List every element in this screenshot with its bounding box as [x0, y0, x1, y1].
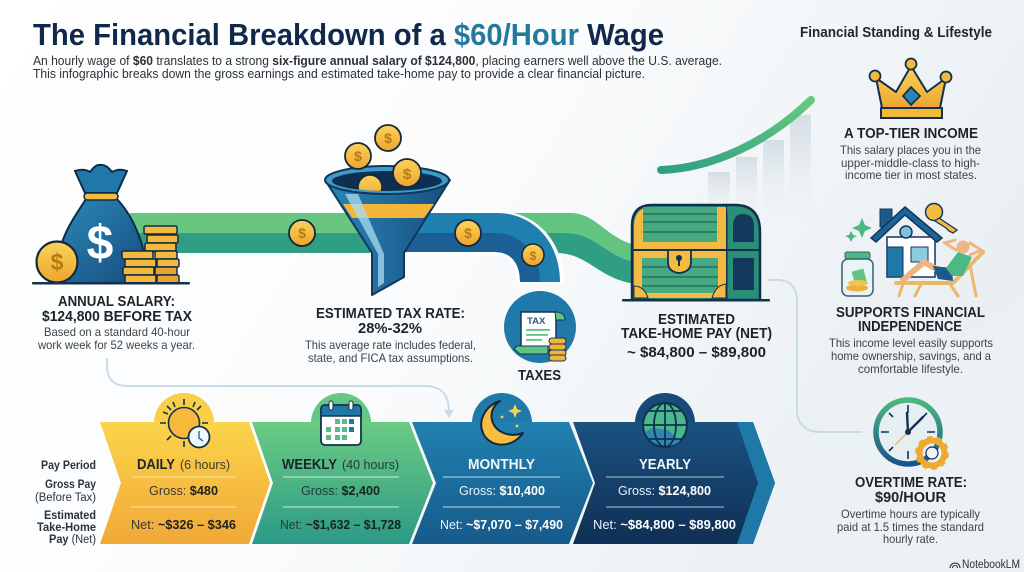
table row labels: Estimated — [44, 510, 96, 522]
arrow head — [444, 410, 454, 418]
text: take-home pay: ESTIMATED — [658, 312, 735, 328]
text: top-tier income — [840, 126, 981, 182]
coin on blue pipe bend: $ — [530, 249, 537, 263]
label: taxes: TAXES — [518, 368, 561, 384]
text: financial independence — [829, 305, 993, 376]
icon: tax funnel: $ — [384, 130, 392, 146]
text: financial independence: home ownership, savings, and a — [831, 349, 991, 363]
panel: daily: Net: ~$326 – $346 — [131, 518, 236, 532]
panel: weekly: Gross: $2,400 — [301, 484, 380, 498]
icon: tax funnel: $ — [403, 166, 412, 183]
table row labels: Pay (Net) — [49, 534, 96, 546]
intro text — [33, 54, 722, 81]
connector: net pay to overtime — [767, 280, 862, 432]
text: take-home pay — [621, 312, 772, 361]
text: top-tier income: This salary places you in the — [840, 143, 981, 157]
table row labels — [35, 460, 97, 546]
table row labels: Gross Pay — [45, 479, 97, 491]
coin on green pipe — [289, 220, 315, 246]
text: estimated tax rate: ESTIMATED TAX RATE: — [316, 306, 465, 322]
coin on green pipe: $ — [298, 225, 306, 241]
panel: yearly: Gross: $124,800 — [618, 484, 711, 498]
coin on blue pipe — [455, 220, 481, 246]
text: overtime rate: paid at 1.5 times the standard — [837, 520, 984, 534]
text: annual salary: work week for 52 weeks a year. — [37, 338, 195, 352]
panel: weekly: Net: ~$1,632 – $1,728 — [280, 518, 401, 532]
text: annual salary: ANNUAL SALARY: — [58, 294, 175, 310]
icon: tax funnel: $ — [354, 148, 362, 164]
text: financial independence: INDEPENDENCE — [858, 319, 962, 335]
table row labels: (Before Tax) — [35, 492, 96, 504]
text: overtime rate: Overtime hours are typically — [841, 507, 980, 521]
icon: calendar — [321, 401, 361, 445]
icon: crown — [870, 58, 952, 118]
text: financial independence: SUPPORTS FINANCIAL — [836, 305, 985, 321]
icon: treasure chest — [622, 205, 770, 302]
panel: daily — [100, 393, 270, 544]
panel: daily: Gross: $480 — [149, 484, 218, 498]
panel: daily: (6 hours) — [180, 457, 230, 472]
text: annual salary: Based on a standard 40-hour — [44, 325, 190, 339]
text: estimated tax rate: state, and FICA tax assumptions. — [308, 351, 473, 365]
icon: taxes document — [504, 291, 576, 363]
panel: yearly — [573, 393, 775, 544]
icon: money bag — [32, 165, 190, 284]
panel: weekly: (40 hours) — [342, 457, 399, 472]
text: take-home pay: ~ $84,800 – $89,800 — [627, 345, 766, 361]
panel: yearly: Net: ~$84,800 – $89,800 — [593, 518, 736, 532]
coin on blue pipe bend — [522, 244, 544, 266]
icon: house, key and lounger — [842, 204, 983, 296]
connector: salary to monthly — [107, 358, 449, 412]
panel: monthly: Net: ~$7,070 – $7,490 — [440, 518, 563, 532]
text: overtime rate: OVERTIME RATE: — [855, 475, 967, 491]
icon: overtime clock — [876, 400, 947, 468]
title: The Financial Breakdown of a $60/Hour Wage — [33, 17, 664, 52]
text: top-tier income: income tier in most states. — [845, 168, 977, 182]
panel: weekly: WEEKLY — [282, 457, 337, 473]
icon: crescent moon — [481, 401, 523, 445]
text: estimated tax rate: 28%-32% — [358, 321, 422, 337]
panel: monthly — [412, 393, 593, 544]
text: estimated tax rate: This average rate includes federal, — [305, 338, 476, 352]
icon: globe — [643, 403, 687, 447]
text: financial independence: This income level easily supports — [829, 336, 993, 350]
icon: money bag: $ — [87, 217, 114, 270]
icon: tax funnel — [325, 125, 450, 295]
panel: weekly — [252, 393, 433, 544]
text: take-home pay: TAKE-HOME PAY (NET) — [621, 326, 772, 342]
coin on blue pipe: $ — [464, 225, 472, 241]
text: top-tier income: upper-middle-class to high- — [841, 156, 980, 170]
text: top-tier income: A TOP-TIER INCOME — [844, 126, 978, 142]
panel: monthly: MONTHLY — [468, 457, 535, 473]
text: overtime rate — [837, 475, 984, 546]
text: annual salary — [37, 294, 195, 352]
text: annual salary: $124,800 BEFORE TAX — [42, 309, 192, 325]
icon: money bag: $ — [51, 249, 64, 275]
text: overtime rate: $90/HOUR — [875, 490, 947, 506]
money flow pipe — [130, 211, 640, 284]
icon: taxes document: TAX — [527, 316, 546, 327]
panel: daily: DAILY — [137, 457, 175, 473]
icon: sun and clock — [160, 399, 210, 448]
heading: financial standing: Financial Standing & Lifestyle — [800, 25, 992, 41]
table row labels: Pay Period — [41, 460, 96, 472]
panel: monthly: Gross: $10,400 — [459, 484, 545, 498]
text: financial independence: comfortable lifestyle. — [858, 362, 963, 376]
text: overtime rate: hourly rate. — [883, 532, 938, 546]
table row labels: Take-Home — [37, 522, 96, 534]
intro text: An hourly wage of $60 translates to a strong six-figure annual salary of $124,800, placing earners well above the U.S. average. — [33, 54, 722, 68]
intro text: This infographic breaks down the gross earnings and estimated take-home pay to provide a clear financial picture. — [33, 67, 645, 81]
text: estimated tax rate — [305, 306, 476, 365]
growth arrow chart — [661, 100, 811, 220]
panel: yearly: YEARLY — [639, 457, 691, 473]
